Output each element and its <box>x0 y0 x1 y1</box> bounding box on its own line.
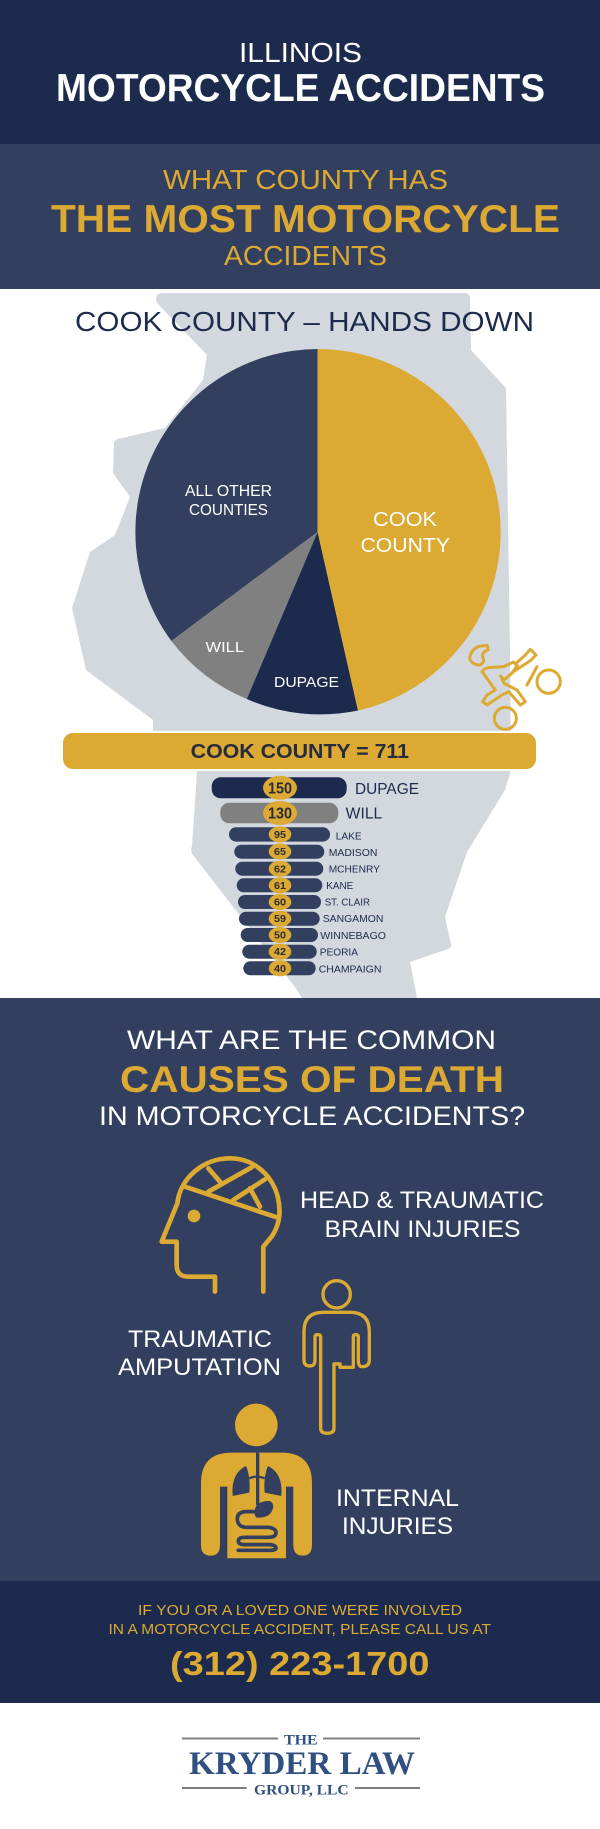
slice: all other counties: COUNTIES <box>189 502 268 519</box>
slice: cook county: COOK <box>373 509 438 531</box>
logo: the kryder law group: GROUP, LLC <box>254 1782 349 1798</box>
bar: sangamon 59: 59 <box>274 914 286 925</box>
bar: winnebago 50: 50 <box>274 930 286 942</box>
bar: sangamon 59 <box>239 911 383 927</box>
bar: champaign 40: CHAMPAIGN <box>319 963 381 975</box>
heading: what county has the most motorcycle accidents: THE MOST MOTORCYCLE <box>51 198 560 241</box>
bar: madison 65: MADISON <box>329 847 377 859</box>
bar: madison 65: 65 <box>274 847 286 858</box>
label: traumatic amputation <box>118 1326 281 1381</box>
bar: kane 61: 61 <box>274 881 286 892</box>
bar: kane 61: KANE <box>326 880 353 892</box>
bar: peoria 42 <box>242 944 358 960</box>
illinois state map background <box>72 293 511 998</box>
label: internal injuries: INTERNAL <box>336 1485 459 1512</box>
icon: amputee figure <box>304 1281 369 1433</box>
bar: mchenry 62: MCHENRY <box>329 863 380 875</box>
bar: will 130: 130 <box>268 806 292 822</box>
heading: causes of death <box>99 1025 525 1131</box>
heading: what county has the most motorcycle accidents: WHAT COUNTY HAS <box>163 164 448 195</box>
bar: winnebago 50: WINNEBAGO <box>320 930 386 942</box>
label: head and traumatic brain injuries <box>300 1187 544 1243</box>
total bar: cook county = 711 <box>62 732 537 770</box>
heading: causes of death: CAUSES OF DEATH <box>120 1059 504 1100</box>
title banner: ILLINOIS <box>239 37 362 68</box>
bar: lake 95: LAKE <box>336 830 362 842</box>
title banner <box>0 0 600 144</box>
bar: lake 95: 95 <box>274 830 286 841</box>
pie chart: accidents by county <box>135 349 501 714</box>
bar: st. clair 60 <box>238 894 370 910</box>
slice: dupage: DUPAGE <box>274 674 339 691</box>
slice: cook county <box>318 349 501 710</box>
bar: st. clair 60: ST. CLAIR <box>325 896 370 908</box>
label: head and traumatic brain injuries: BRAIN INJURIES <box>324 1216 520 1243</box>
bar: kane 61 <box>237 877 353 893</box>
heading: causes of death: WHAT ARE THE COMMON <box>127 1025 496 1055</box>
bar: champaign 40: 40 <box>274 964 286 975</box>
slice: dupage <box>247 532 358 714</box>
bar: madison 65 <box>234 844 377 860</box>
label: internal injuries: INJURIES <box>342 1513 453 1540</box>
logo: the kryder law group: KRYDER LAW <box>189 1746 415 1782</box>
label: traumatic amputation: AMPUTATION <box>118 1354 281 1381</box>
logo: the kryder law group: THE <box>284 1732 318 1748</box>
heading: causes of death: IN MOTORCYCLE ACCIDENTS? <box>99 1101 525 1131</box>
icon: bandaged head <box>162 1158 279 1292</box>
subheading: cook county hands down: COOK COUNTY – HANDS DOWN <box>75 306 534 337</box>
title banner: MOTORCYCLE ACCIDENTS <box>56 67 545 110</box>
label: head and traumatic brain injuries: HEAD & TRAUMATIC <box>300 1187 544 1214</box>
bar chart: other counties <box>212 776 419 976</box>
slice: all other counties: ALL OTHER <box>185 483 272 500</box>
bar: dupage 150 <box>212 776 419 800</box>
bar: peoria 42: PEORIA <box>320 946 358 958</box>
footer call to action <box>0 1581 600 1703</box>
slice: will: WILL <box>206 639 244 656</box>
bar: sangamon 59: SANGAMON <box>323 913 383 925</box>
icon: body with internal organs <box>201 1404 312 1558</box>
bar: winnebago 50 <box>241 927 386 943</box>
bar: dupage 150: DUPAGE <box>355 781 419 798</box>
bar: will 130 <box>220 801 383 825</box>
bar: champaign 40 <box>243 960 381 976</box>
panel: causes of death background <box>0 998 600 1582</box>
footer call to action: (312) 223-1700 <box>170 1645 430 1682</box>
footer call to action: IN A MOTORCYCLE ACCIDENT, PLEASE CALL US AT <box>108 1621 491 1638</box>
icon: motorcycle rider <box>470 645 560 729</box>
bar: will 130: WILL <box>346 805 383 822</box>
bar: mchenry 62 <box>235 861 380 877</box>
label: traumatic amputation: TRAUMATIC <box>128 1326 272 1353</box>
slice: cook county: COUNTY <box>360 535 450 557</box>
logo: the kryder law group <box>182 1732 420 1798</box>
total bar: cook county = 711: COOK COUNTY = 711 <box>191 741 409 763</box>
heading: what county has the most motorcycle accidents <box>0 144 600 289</box>
slice: will <box>171 532 318 699</box>
heading: what county has the most motorcycle accidents: ACCIDENTS <box>224 240 387 271</box>
bar: mchenry 62: 62 <box>274 864 286 876</box>
label: internal injuries <box>336 1485 459 1540</box>
bar: lake 95 <box>229 826 362 842</box>
bar: st. clair 60: 60 <box>274 898 286 908</box>
bar: peoria 42: 42 <box>274 947 286 958</box>
slice: all other counties <box>135 349 318 641</box>
footer call to action: IF YOU OR A LOVED ONE WERE INVOLVED <box>138 1602 462 1619</box>
bar: dupage 150: 150 <box>268 780 292 797</box>
